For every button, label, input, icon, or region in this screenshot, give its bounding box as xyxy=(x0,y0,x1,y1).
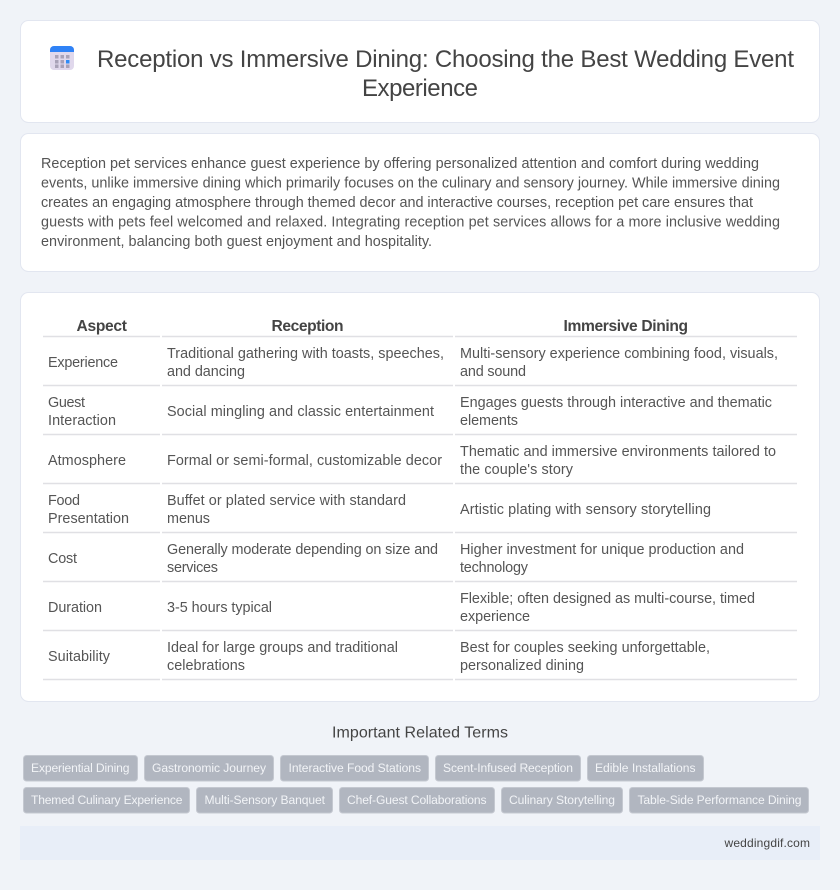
row: Food Presentation: Presentation xyxy=(48,511,129,527)
panel: comparison table xyxy=(20,292,820,702)
row: Cost: Generally moderate depending on size and xyxy=(167,542,438,558)
tag: Experiential Dining: Experiential Dining xyxy=(31,761,130,775)
row: Atmosphere: Atmosphere xyxy=(48,453,126,469)
title xyxy=(97,46,794,102)
title: Reception vs Immersive Dining: Choosing the Best Wedding Event xyxy=(97,46,794,73)
row: Duration xyxy=(43,591,797,630)
row: Duration: experience xyxy=(460,609,530,625)
tag: Experiential Dining xyxy=(24,756,138,781)
row: Food Presentation: Buffet or plated service with standard xyxy=(167,493,406,509)
row: Duration: Flexible; often designed as multi-course, timed xyxy=(460,591,755,607)
intro text: creates an engaging atmosphere through themed decor and interactive courses, reception pet care ensures that xyxy=(41,195,753,211)
intro text: environment, balancing both guest enjoyment and hospitality. xyxy=(41,234,432,250)
tag: Scent-Infused Reception xyxy=(436,756,580,781)
row: Experience: Traditional gathering with toasts, speeches, xyxy=(167,346,444,362)
row: Cost: services xyxy=(167,560,218,576)
intro text: Reception pet services enhance guest experience by offering personalized attention and comfort during wedding xyxy=(41,156,759,172)
row: Food Presentation: menus xyxy=(167,511,210,527)
panel: intro paragraph xyxy=(20,134,820,272)
tag row 1 xyxy=(24,756,704,781)
tag: Table-Side Performance Dining: Table-Side Performance Dining xyxy=(638,793,802,807)
row: Food Presentation xyxy=(43,493,797,532)
row: Guest Interaction: Social mingling and classic entertainment xyxy=(167,404,434,420)
intro text: guests with pets feel welcomed and relaxed. Integrating reception pet services allows for a more inclusive wedding xyxy=(41,214,780,230)
row: Experience: and dancing xyxy=(167,364,245,380)
row: Atmosphere: Thematic and immersive environments tailored to xyxy=(460,444,776,460)
row: Suitability: Best for couples seeking unforgettable, xyxy=(460,640,710,656)
row: Guest Interaction: Engages guests through interactive and thematic xyxy=(460,395,772,411)
row: Suitability: Suitability xyxy=(48,649,111,665)
tag: Edible Installations xyxy=(588,756,704,781)
tag row 2 xyxy=(24,788,808,813)
row: Atmosphere: Formal or semi-formal, customizable decor xyxy=(167,453,442,469)
tag: Culinary Storytelling xyxy=(502,788,622,813)
row: Experience: Experience xyxy=(48,355,118,371)
tag: Interactive Food Stations: Interactive Food Stations xyxy=(288,761,421,775)
heading: important related terms: Important Related Terms xyxy=(332,724,508,742)
row: Suitability: Ideal for large groups and traditional xyxy=(167,640,398,656)
intro text: events, unlike immersive dining which primarily focuses on the culinary and sensory journey. While immersive dining xyxy=(41,176,780,192)
row: Suitability xyxy=(43,640,797,680)
intro text xyxy=(41,156,780,250)
row: Guest Interaction: Guest xyxy=(48,395,85,411)
row: Duration: Duration xyxy=(48,600,102,616)
tag: Scent-Infused Reception: Scent-Infused Reception xyxy=(443,761,573,775)
row: Duration: 3-5 hours typical xyxy=(167,600,272,616)
row: Guest Interaction: Interaction xyxy=(48,413,116,429)
title: Experience xyxy=(362,75,478,102)
tag: Culinary Storytelling: Culinary Storytelling xyxy=(509,793,615,807)
row: Food Presentation: Food xyxy=(48,493,80,509)
row: Experience: Multi-sensory experience combining food, visuals, xyxy=(460,346,778,362)
tag: Edible Installations: Edible Installations xyxy=(595,761,696,775)
tag: Gastronomic Journey: Gastronomic Journey xyxy=(152,761,267,775)
row: Atmosphere xyxy=(43,444,797,484)
row: Atmosphere: the couple's story xyxy=(460,462,574,478)
tag: Multi-Sensory Banquet xyxy=(196,788,332,813)
table header: Aspect xyxy=(76,318,127,335)
tag: Interactive Food Stations xyxy=(280,756,428,781)
tag: Themed Culinary Experience: Themed Culinary Experience xyxy=(31,793,183,807)
row: Cost xyxy=(43,542,797,582)
row: Suitability: personalized dining xyxy=(460,658,584,674)
table header xyxy=(43,318,797,336)
tag: Chef-Guest Collaborations xyxy=(340,788,494,813)
table header: Immersive Dining xyxy=(564,318,688,335)
tag: Multi-Sensory Banquet: Multi-Sensory Banquet xyxy=(204,793,326,807)
footer bar xyxy=(20,826,820,860)
row: Guest Interaction: elements xyxy=(460,413,518,429)
row: Cost: Cost xyxy=(48,551,77,567)
table header: Reception xyxy=(272,318,344,335)
row: Food Presentation: Artistic plating with sensory storytelling xyxy=(460,502,711,518)
tag: Table-Side Performance Dining xyxy=(630,788,808,813)
tag: Chef-Guest Collaborations: Chef-Guest Collaborations xyxy=(347,793,486,807)
icon: calendar xyxy=(50,46,74,70)
row: Suitability: celebrations xyxy=(167,658,245,674)
tag: Gastronomic Journey xyxy=(144,756,274,781)
row: Guest Interaction xyxy=(43,395,797,434)
tag: Themed Culinary Experience xyxy=(24,788,190,813)
footer site name: weddingdif.com xyxy=(724,836,810,850)
panel: title card xyxy=(20,20,820,122)
row: Cost: technology xyxy=(460,560,529,576)
row: Experience: and sound xyxy=(460,364,526,380)
row: Experience xyxy=(43,346,797,386)
row: Cost: Higher investment for unique production and xyxy=(460,542,744,558)
